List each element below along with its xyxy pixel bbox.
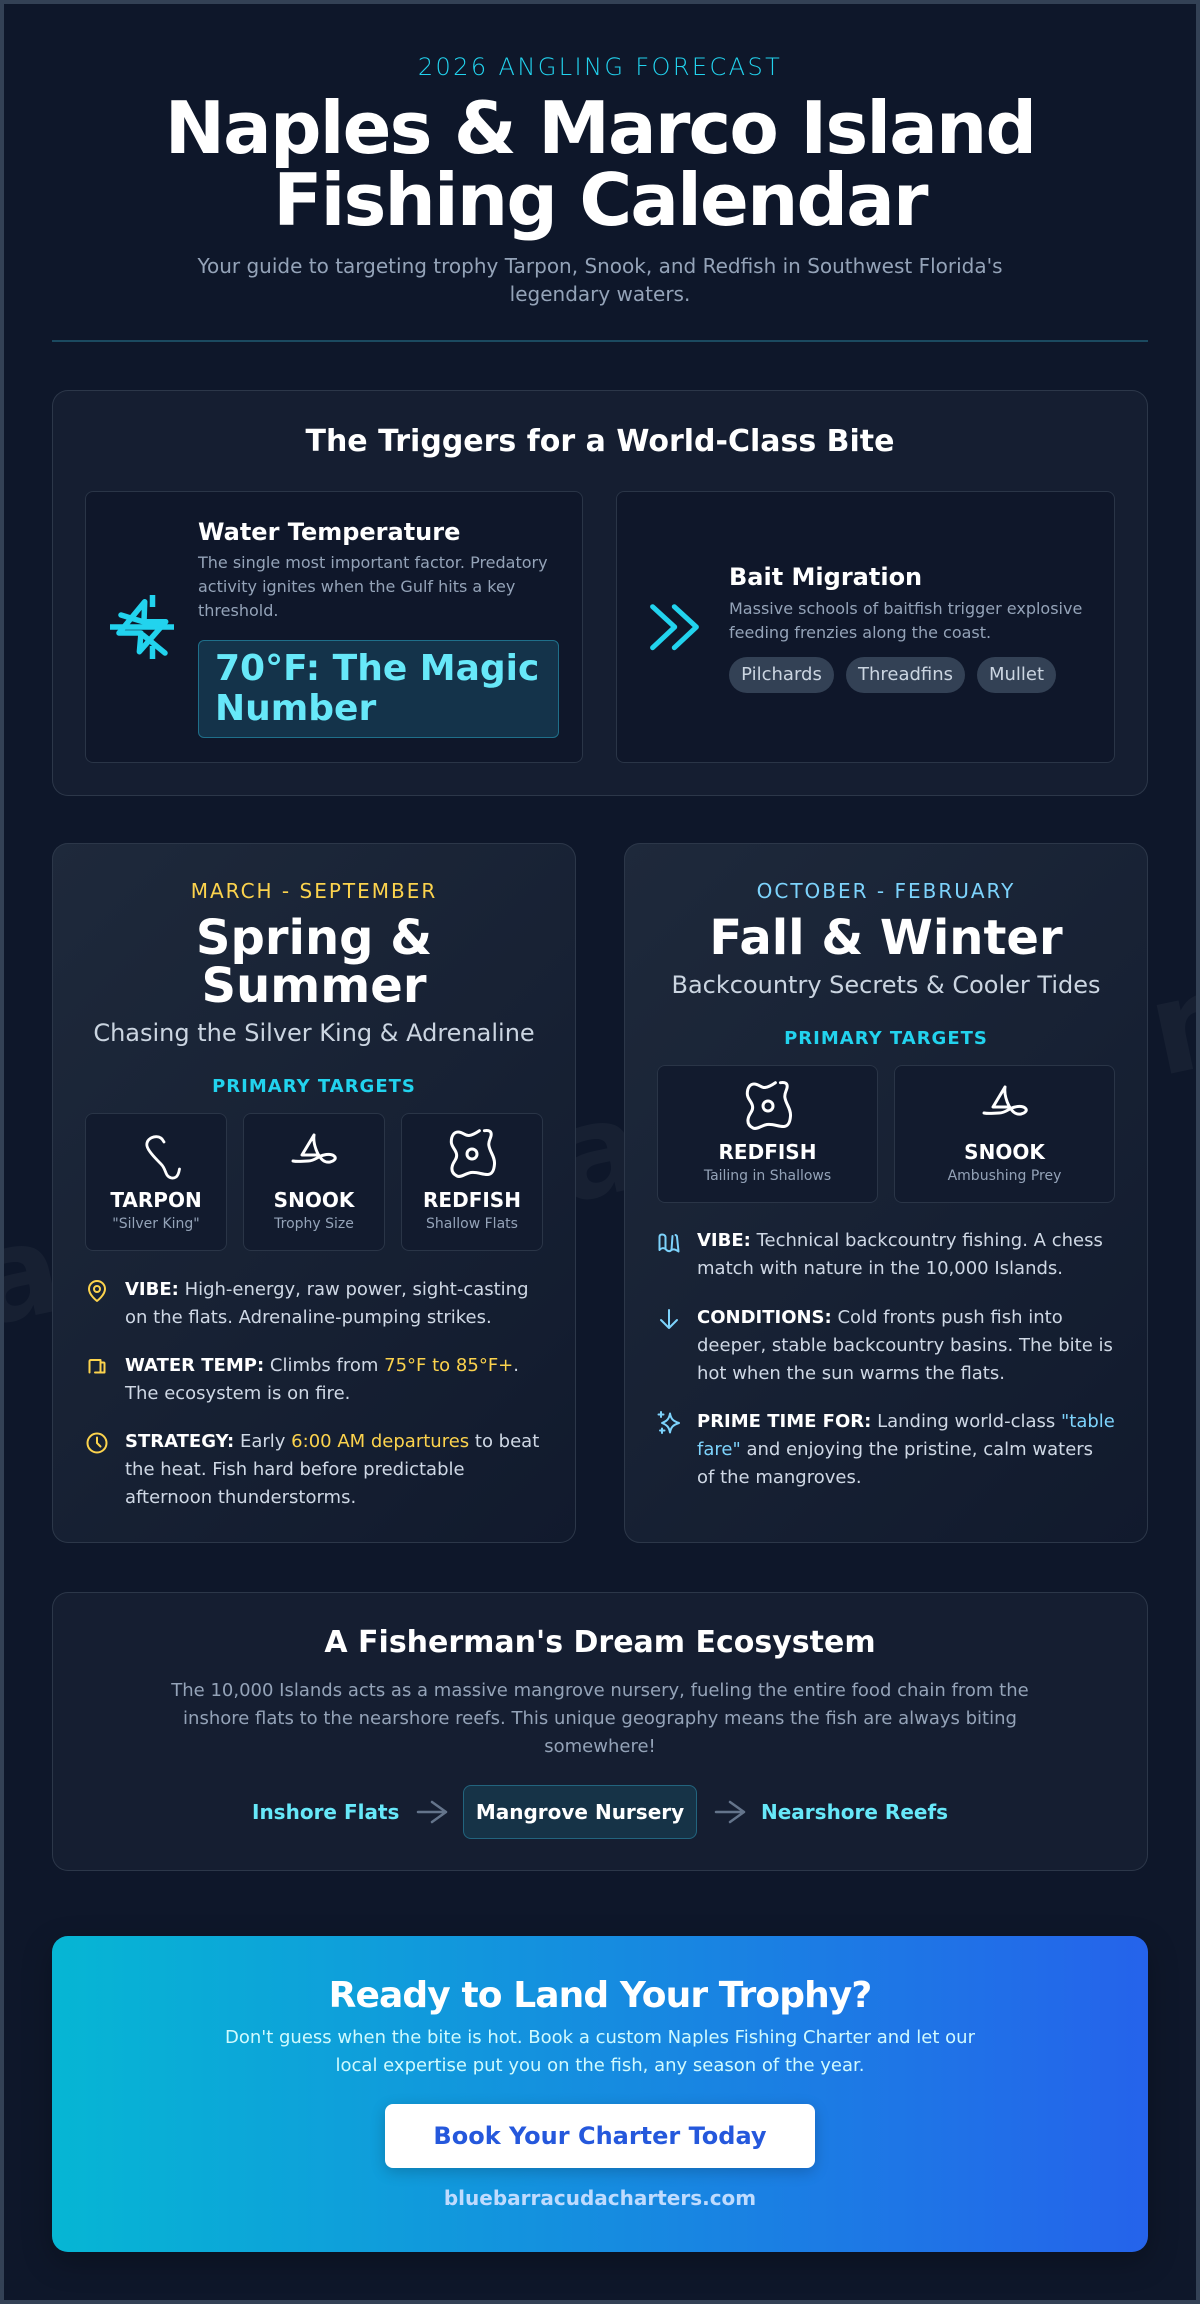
- bullet: water temp: [124, 1355, 519, 1404]
- target: redfish: REDFISH: [719, 1140, 816, 1164]
- target: snook: SNOOK: [274, 1188, 354, 1212]
- bullet: vibe: on the flats. Adrenaline-pumping strikes.: [125, 1307, 492, 1328]
- title: Naples & Marco Island: [165, 86, 1035, 170]
- target: redfish: [401, 1113, 543, 1251]
- bullet: water temp: WATER TEMP: Climbs from 75°F to 85°F+.: [125, 1355, 519, 1376]
- target: snook: Ambushing Prey: [948, 1168, 1061, 1184]
- subtitle: [197, 254, 1003, 306]
- icon: down arrow: [660, 1309, 678, 1329]
- subtitle: legendary waters.: [510, 282, 690, 306]
- title: [165, 86, 1035, 242]
- heading: ecosystem: A Fisherman's Dream Ecosystem: [324, 1625, 876, 1660]
- icon: sparkles: [658, 1411, 680, 1434]
- text: bait migration description: [729, 599, 1082, 642]
- heading: bait migration: Bait Migration: [729, 563, 922, 591]
- background watermark letters: a: [539, 1070, 655, 1234]
- season subtitle: Backcountry Secrets & Cooler Tides: [671, 971, 1100, 999]
- season subtitle: Chasing the Silver King & Adrenaline: [93, 1019, 535, 1047]
- button: book charter: [385, 2104, 815, 2168]
- bullet: strategy: STRATEGY: Early 6:00 AM departures to beat: [125, 1431, 539, 1452]
- primary targets label: PRIMARY TARGETS: [212, 1076, 416, 1097]
- tag: threadfins: Threadfins: [858, 664, 953, 685]
- panel: call to action: [52, 1936, 1148, 2252]
- flow step: mangrove nursery: [463, 1785, 697, 1839]
- panel: ecosystem: [52, 1592, 1148, 1871]
- heading: triggers: The Triggers for a World-Class Bite: [305, 424, 894, 459]
- icon: water temperature gauge: [88, 1359, 106, 1374]
- target: redfish: Tailing in Shallows: [704, 1168, 831, 1184]
- bullet: vibe: VIBE: High-energy, raw power, sight-casting: [125, 1279, 529, 1300]
- callout: magic number: [198, 640, 559, 738]
- target: tarpon: "Silver King": [112, 1216, 200, 1232]
- season title: Spring &: [196, 910, 432, 966]
- icon: folded map: [658, 1234, 680, 1252]
- arrow: [714, 1800, 746, 1824]
- bullet: strategy: [125, 1431, 539, 1508]
- target: snook: [894, 1065, 1115, 1203]
- bullet: conditions: CONDITIONS: Cold fronts push fish into: [697, 1307, 1063, 1328]
- bullet: vibe: match with nature in the 10,000 Islands.: [697, 1258, 1063, 1279]
- text: water temperature description: The single most important factor. Predatory: [198, 553, 548, 572]
- target: redfish: [657, 1065, 878, 1203]
- tag: pilchards: Pilchards: [741, 664, 822, 685]
- bullet: vibe: [125, 1279, 529, 1328]
- bullet: prime time: [697, 1411, 1115, 1488]
- subtitle: Your guide to targeting trophy Tarpon, Snook, and Redfish in Southwest Florida's: [197, 254, 1003, 278]
- text: ecosystem description: inshore flats to the nearshore reefs. This unique geography means the fish are always biting: [183, 1708, 1017, 1729]
- icon: map pin: [88, 1280, 106, 1302]
- panel: triggers for a world-class bite: [52, 390, 1148, 796]
- text: ecosystem description: somewhere!: [544, 1736, 656, 1757]
- bullet: vibe: VIBE: Technical backcountry fishing. A chess: [697, 1230, 1103, 1251]
- text: bait migration description: Massive schools of baitfish trigger explosive: [729, 599, 1082, 618]
- season title: Summer: [202, 958, 426, 1014]
- target: tarpon: [85, 1113, 227, 1251]
- callout: magic number: Number: [215, 688, 376, 729]
- tag: threadfins: [846, 657, 965, 693]
- primary targets label: PRIMARY TARGETS: [784, 1028, 988, 1049]
- season title: Fall & Winter: [709, 910, 1063, 966]
- bullet: conditions: hot when the sun warms the flats.: [697, 1363, 1005, 1384]
- eyebrow: forecast: 2026 ANGLING FORECAST: [418, 53, 782, 81]
- text: water temperature description: threshold.: [198, 601, 278, 620]
- bullet: water temp: The ecosystem is on fire.: [125, 1383, 350, 1404]
- season title: [196, 910, 432, 1014]
- icon: clock: [86, 1432, 108, 1454]
- icon: thermal bolt: [110, 595, 174, 659]
- target: snook: SNOOK: [964, 1140, 1045, 1164]
- flow step: inshore flats: Inshore Flats: [252, 1800, 399, 1824]
- title: Fishing Calendar: [273, 158, 927, 242]
- flow step: nearshore reefs: Nearshore Reefs: [761, 1800, 948, 1824]
- tag: mullet: [977, 657, 1056, 693]
- icon: double chevrons: [650, 604, 699, 650]
- bullet: prime time: PRIME TIME FOR: Landing world-class "table: [697, 1411, 1115, 1432]
- text: water temperature description: [198, 553, 548, 620]
- heading: water temperature: Water Temperature: [198, 518, 460, 546]
- heading: call to action: Ready to Land Your Trophy?: [329, 1975, 871, 2016]
- bullet: strategy: afternoon thunderstorms.: [125, 1487, 356, 1508]
- season months: OCTOBER - FEBRUARY: [757, 879, 1015, 903]
- bullet: conditions: deeper, stable backcountry basins. The bite is: [697, 1335, 1113, 1356]
- bullet: prime time: fare" and enjoying the pristine, calm waters: [697, 1439, 1093, 1460]
- target: snook: [243, 1113, 385, 1251]
- tag: pilchards: [729, 657, 834, 693]
- card: water temperature: [85, 491, 583, 763]
- target: redfish: Shallow Flats: [426, 1216, 518, 1232]
- text: bait migration description: feeding frenzies along the coast.: [729, 623, 991, 642]
- website: bluebarracudacharters.com: [444, 2186, 756, 2210]
- bullet: prime time: of the mangroves.: [697, 1467, 862, 1488]
- bullet: conditions: [697, 1307, 1113, 1384]
- arrow: [416, 1800, 448, 1824]
- card: bait migration: [616, 491, 1115, 763]
- text: call to action: [225, 2027, 976, 2076]
- header: [52, 53, 1148, 342]
- text: call to action: Don't guess when the bite is hot. Book a custom Naples Fishing Charter and let our: [225, 2027, 975, 2048]
- panel: fall and winter: [624, 843, 1148, 1543]
- text: water temperature description: activity ignites when the Gulf hits a key: [198, 577, 515, 596]
- season months: MARCH - SEPTEMBER: [191, 879, 437, 903]
- bullet: strategy: the heat. Fish hard before predictable: [125, 1459, 465, 1480]
- target: snook: Trophy Size: [274, 1216, 354, 1232]
- tag: mullet: Mullet: [989, 664, 1044, 685]
- callout: magic number: 70°F: The Magic: [215, 648, 539, 689]
- button: book charter: Book Your Charter Today: [433, 2122, 767, 2150]
- text: call to action: local expertise put you on the fish, any season of the year.: [336, 2055, 864, 2076]
- text: ecosystem description: [171, 1680, 1029, 1757]
- text: ecosystem description: The 10,000 Islands acts as a massive mangrove nursery, fueling the entire food chain from the: [171, 1680, 1029, 1701]
- target: redfish: REDFISH: [423, 1188, 521, 1212]
- target: tarpon: TARPON: [110, 1188, 202, 1212]
- bullet: vibe: [697, 1230, 1103, 1279]
- panel: spring and summer: [52, 843, 576, 1543]
- flow step: mangrove nursery: Mangrove Nursery: [476, 1800, 684, 1824]
